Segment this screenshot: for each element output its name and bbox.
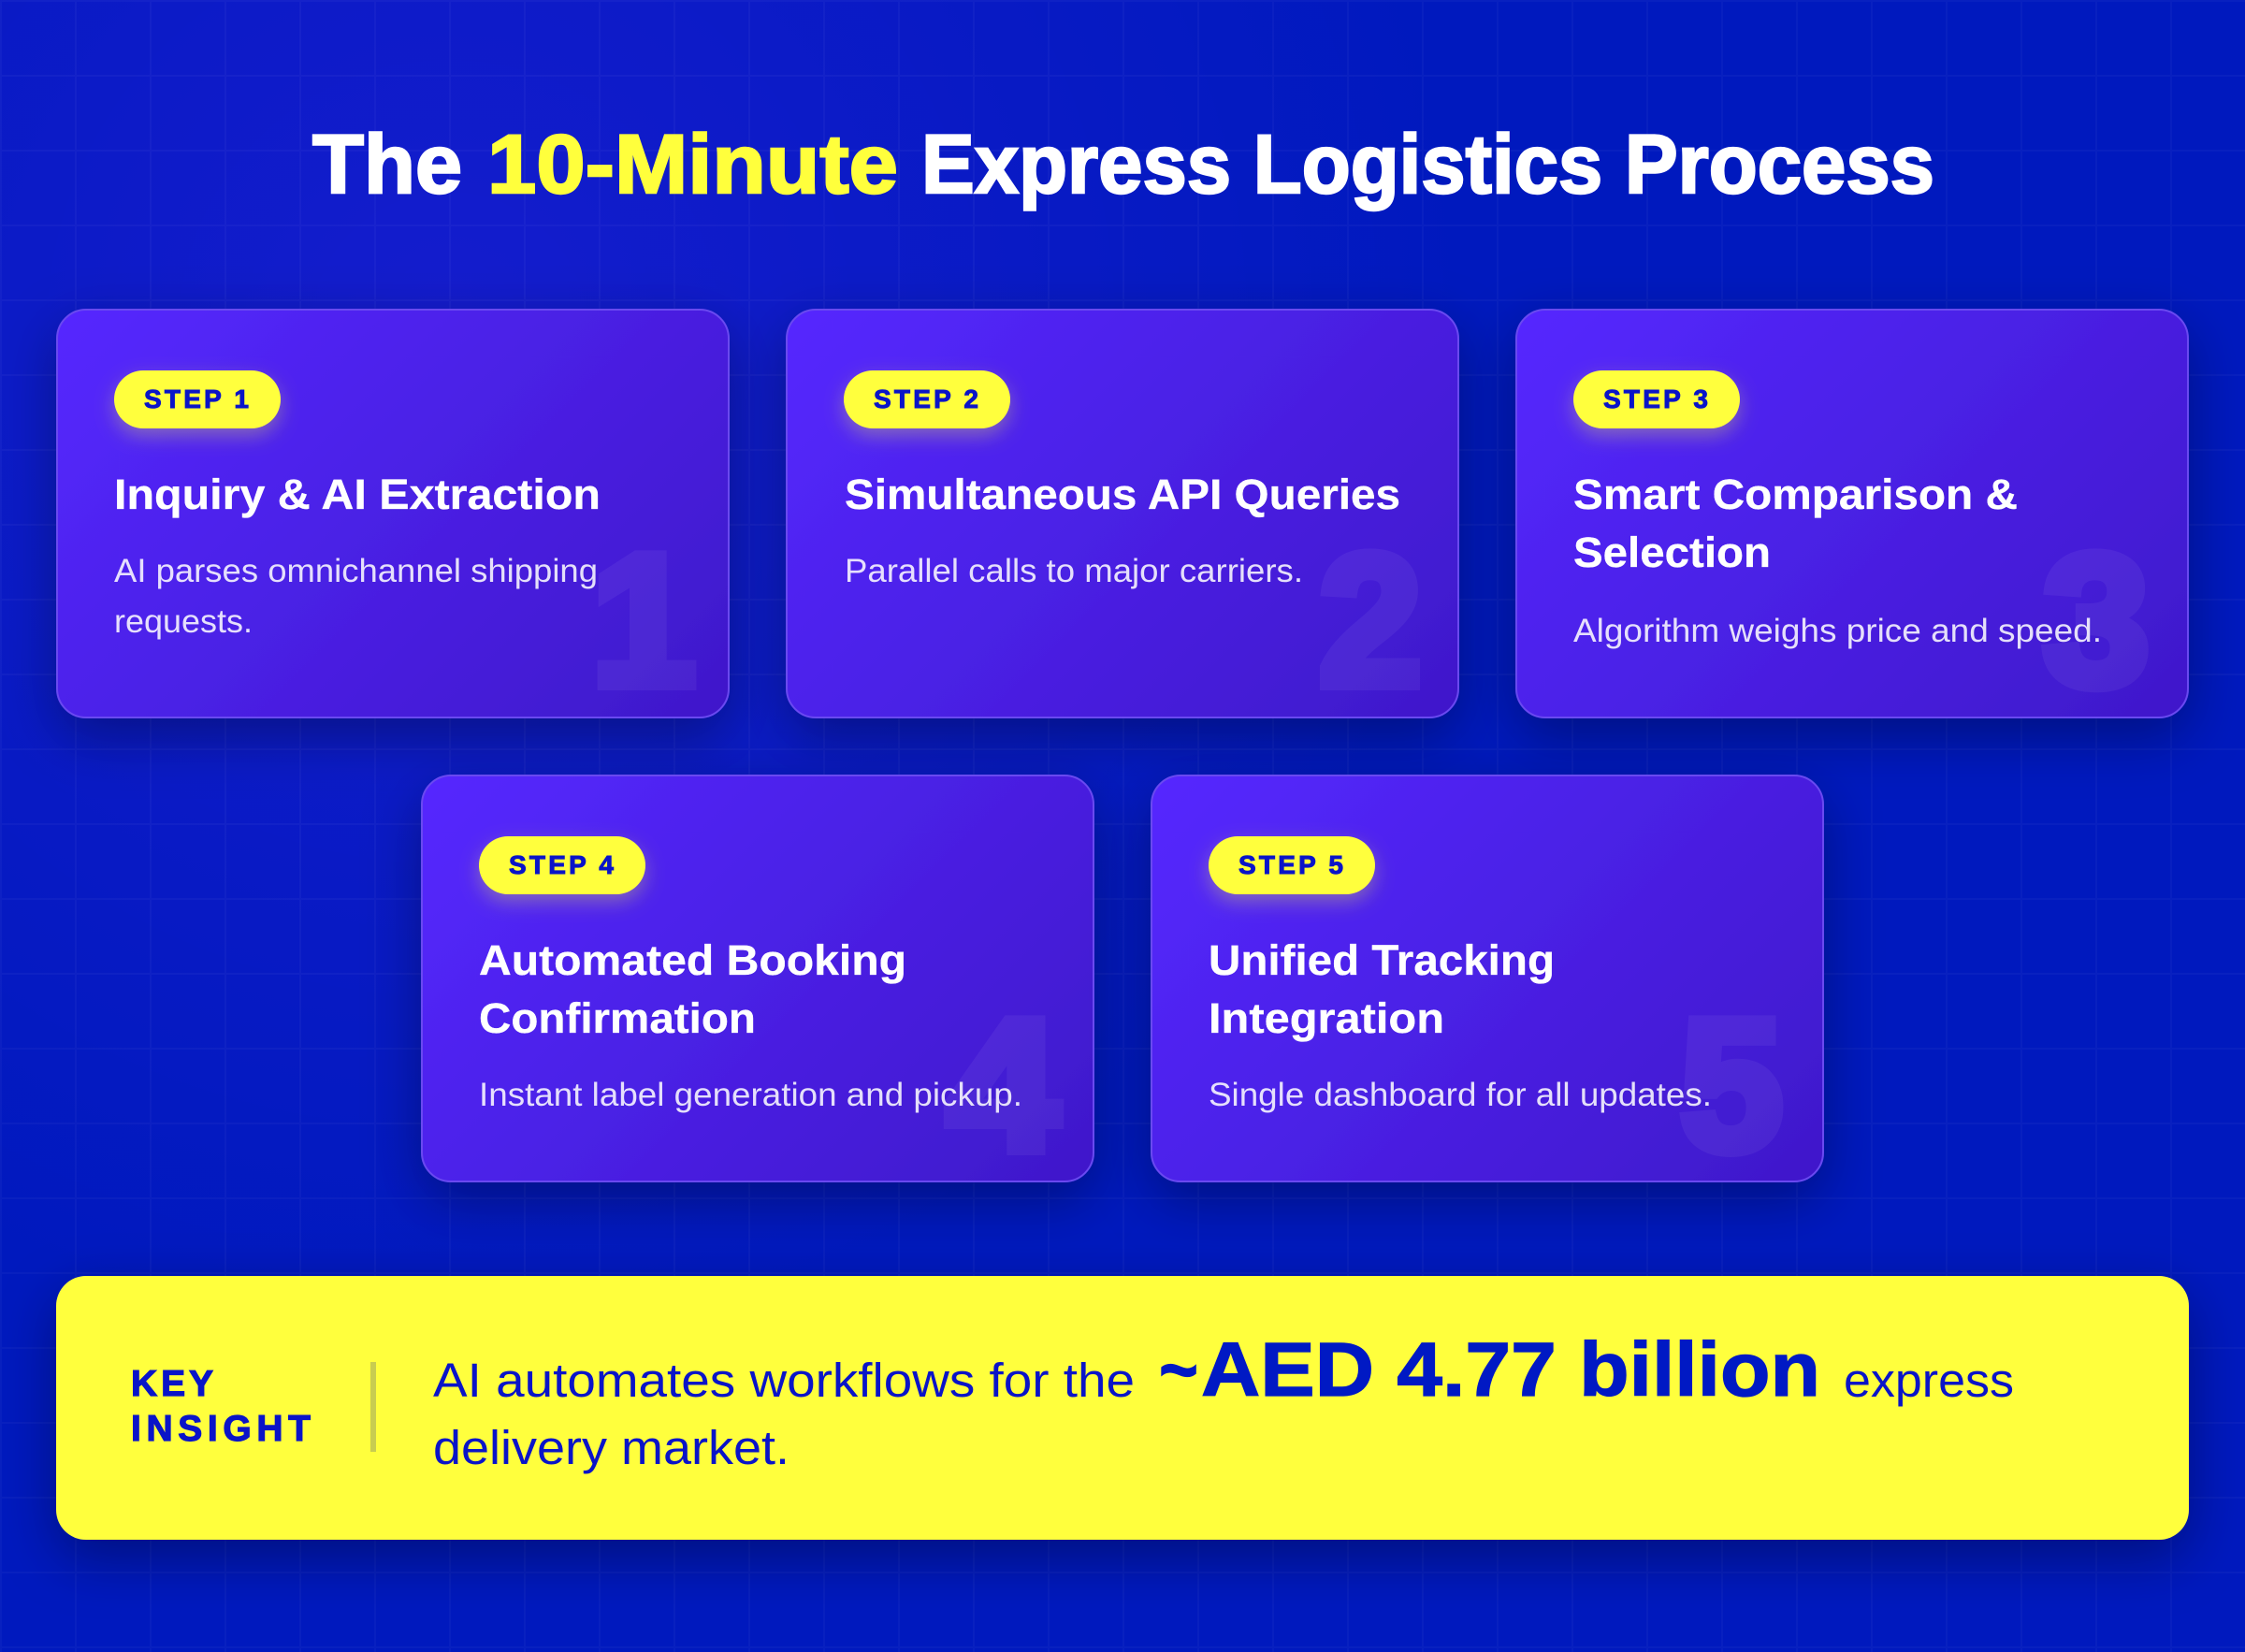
badge: step 5: STEP 5 [1238,850,1343,879]
heading: step 4: Confirmation [479,994,756,1042]
heading: step 3 [1573,471,2018,576]
heading: step 3: Smart Comparison & [1573,471,2018,518]
badge: step 4 [479,836,645,894]
badge: step 3 [1573,370,1740,428]
description: step 4: Instant label generation and pickup. [479,1077,1022,1113]
heading: step 3: Selection [1573,529,1771,576]
panel: step 5 [1151,775,1823,1190]
step number watermark 4: 4 [947,981,1059,1190]
badge: step 2: STEP 2 [874,384,978,413]
badge: step 3: STEP 3 [1603,384,1708,413]
insight text: delivery market. [433,1421,789,1474]
insight text: AI automates workflows for the [433,1354,1135,1407]
step number watermark 1: 1 [591,516,696,725]
description: step 1 [114,553,598,640]
key insight label [131,1364,311,1449]
panel: step 2 [787,310,1458,725]
heading: step 2: Simultaneous API Queries [845,471,1400,518]
heading: step 1: Inquiry & AI Extraction [114,471,601,518]
badge: step 5 [1209,836,1375,894]
title [312,117,1934,210]
step number watermark 2: 2 [1319,516,1422,725]
title: The [312,117,462,210]
badge: step 4: STEP 4 [509,850,614,879]
step number watermark 3: 3 [2043,516,2150,725]
description: step 1: AI parses omnichannel shipping [114,553,598,589]
insight text [433,1327,2014,1474]
heading: step 5 [1209,936,1555,1042]
description: step 2: Parallel calls to major carriers. [845,553,1303,589]
title: 10-Minute [487,117,898,210]
badge: step 1: STEP 1 [144,384,249,413]
key insight label: INSIGHT [131,1409,311,1449]
description: step 1: requests. [114,603,253,640]
title: Express Logistics Process [921,117,1934,210]
heading: step 5: Unified Tracking [1209,936,1555,984]
panel: key insight banner [56,1276,2189,1540]
heading: step 4 [479,936,906,1042]
heading: step 5: Integration [1209,994,1444,1042]
badge: step 1 [114,370,281,428]
panel: step 3 [1516,310,2188,725]
highlighted market value: AED 4.77 billion [1201,1327,1820,1413]
insight text: express [1844,1354,2014,1407]
description: step 5: Single dashboard for all updates. [1209,1077,1712,1113]
description: step 3: Algorithm weighs price and speed. [1573,613,2102,649]
badge: step 2 [844,370,1010,428]
highlighted market value: ~ [1159,1327,1198,1413]
step number watermark 5: 5 [1680,981,1783,1190]
divider [370,1362,376,1452]
panel: step 4 [422,775,1094,1190]
key insight label: KEY [131,1364,213,1404]
heading: step 4: Automated Booking [479,936,906,984]
panel: step 1 [57,310,729,725]
